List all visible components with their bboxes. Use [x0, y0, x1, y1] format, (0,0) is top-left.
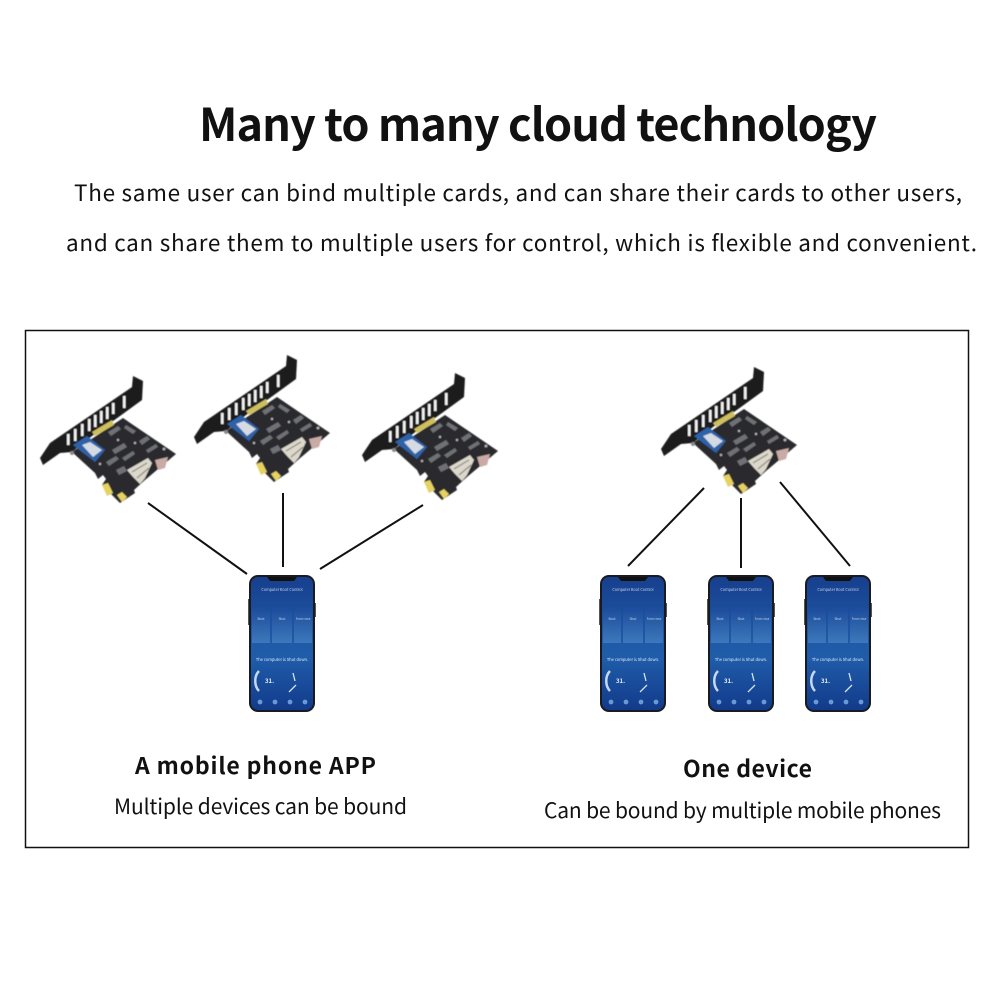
- icon: PCIe card 3: [362, 373, 498, 500]
- group: one app many devices: [40, 355, 498, 821]
- heading: one device: One device: [683, 750, 812, 784]
- icon: phone middle: [707, 575, 775, 712]
- group: one device many phones: [544, 367, 941, 825]
- heading: a mobile phone app: A mobile phone APP: [134, 747, 376, 781]
- icon: phone right: [804, 575, 872, 712]
- connector lines to phone: [148, 493, 423, 574]
- panel: diagram frame: [26, 330, 968, 848]
- caption: multiple phones: Can be bound by multiple mobile phones: [544, 795, 941, 825]
- icon: PCIe card 4: [661, 367, 797, 494]
- icon: PCIe card 1: [40, 376, 176, 503]
- icon: phone app: [248, 575, 316, 712]
- icon: PCIe card 2: [194, 355, 330, 482]
- intro text: and can share them to multiple users for control, which is flexible and convenient.: [66, 226, 977, 258]
- intro text: [66, 176, 977, 258]
- connector lines to phones: [628, 482, 850, 568]
- icon: phone left: [599, 575, 667, 712]
- title: Many to many cloud technology: [199, 89, 877, 154]
- caption: multiple devices: Multiple devices can be bound: [114, 791, 407, 821]
- intro text: The same user can bind multiple cards, and can share their cards to other users,: [74, 176, 962, 208]
